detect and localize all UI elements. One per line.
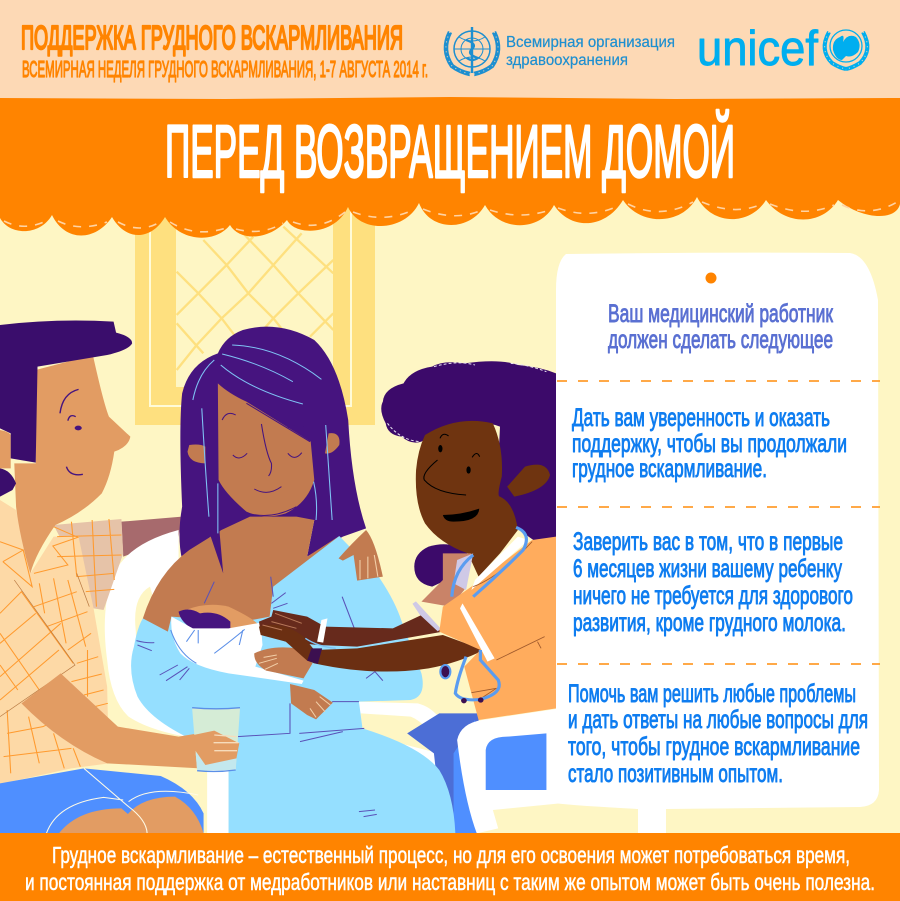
- panel: health worker tasks: [553, 253, 880, 833]
- text block: first six months: [573, 528, 853, 637]
- header band: [0, 0, 900, 99]
- icon: WHO emblem: [446, 27, 498, 74]
- text block: confidence and support: грудное вскармливание.: [572, 455, 767, 483]
- WHO name: [506, 34, 675, 69]
- man: [0, 321, 239, 833]
- awning stitching: [4, 202, 897, 232]
- armchair: [105, 517, 479, 833]
- window: [135, 205, 375, 425]
- orange dot: [706, 272, 716, 284]
- health worker: [381, 361, 556, 720]
- panel heading: [608, 300, 834, 354]
- text block: solving problems: стало позитивным опытом.: [568, 760, 783, 788]
- heading: ПОДДЕРЖКА ГРУДНОГО ВСКАРМЛИВАНИЯ: [21, 19, 403, 56]
- icon: UNICEF emblem: [825, 30, 867, 69]
- footer text: [25, 842, 875, 895]
- text block: solving problems: [568, 680, 868, 788]
- orange awning: [0, 97, 900, 238]
- baby: [171, 605, 304, 684]
- text: ВСЕМИРНАЯ НЕДЕЛЯ ГРУДНОГО ВСКАРМЛИВАНИЯ, 1-7 АВГУСТА 2014 г.: [22, 56, 428, 82]
- woman: [131, 327, 455, 833]
- illustration: family with health worker: [0, 321, 560, 833]
- woman's hands: [254, 530, 383, 719]
- health worker chair: [457, 708, 560, 833]
- health worker arms: [259, 610, 484, 672]
- glass of water: [186, 708, 240, 772]
- text block: confidence and support: [572, 404, 847, 483]
- footer band: [0, 833, 900, 901]
- WHO name: здравоохранения: [506, 52, 628, 69]
- WHO name: Всемирная организация: [506, 34, 675, 51]
- UNICEF wordmark: unicef: [697, 22, 818, 76]
